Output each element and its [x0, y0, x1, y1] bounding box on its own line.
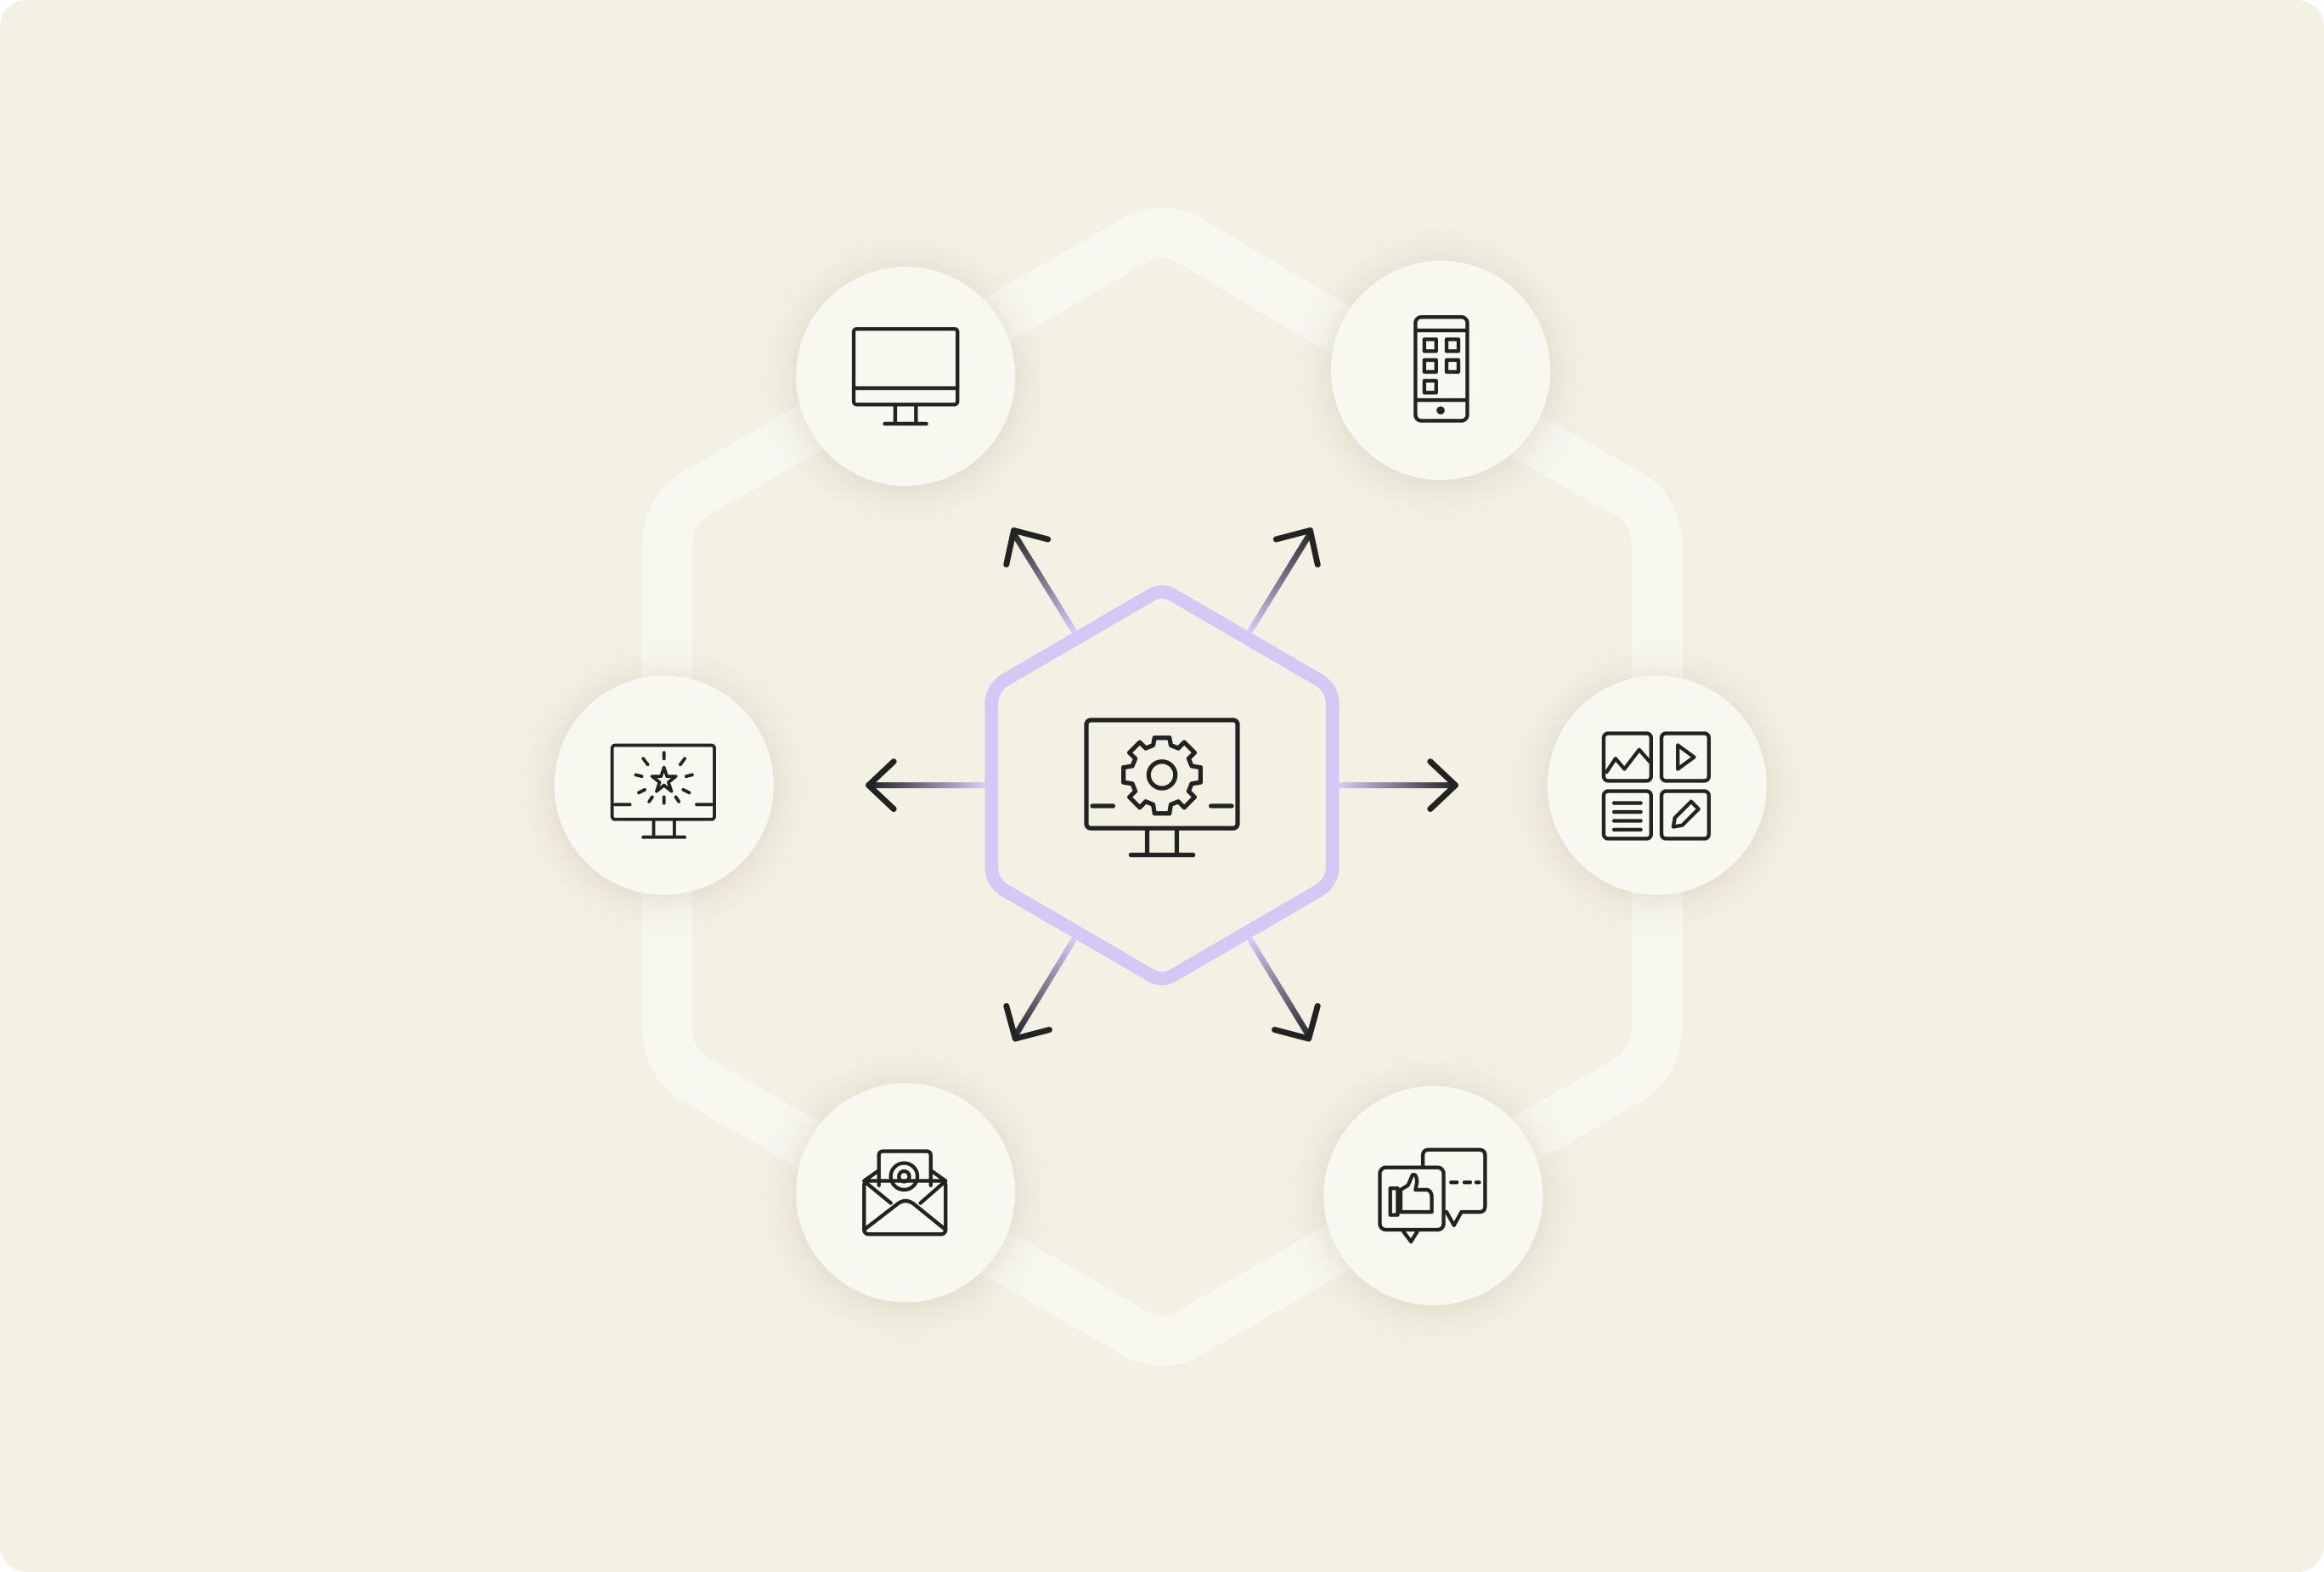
outer hexagon ring — [667, 233, 1657, 1341]
icon: central monitor with gear — [1086, 720, 1238, 855]
node: media content (right) — [1548, 676, 1767, 895]
arrow: lower left — [1007, 941, 1073, 1039]
icon: monitor — [854, 329, 957, 424]
node: featured screen (left) — [555, 676, 774, 895]
arrow: lower right — [1251, 941, 1317, 1039]
icon: chat bubbles with like — [1379, 1150, 1485, 1242]
node: desktop monitor (top left) — [796, 267, 1015, 486]
node: mobile phone (top right) — [1331, 261, 1550, 480]
central hexagon — [991, 592, 1333, 978]
node: social chat (bottom right) — [1323, 1086, 1543, 1305]
icon: monitor with star — [612, 746, 714, 837]
icon: media grid — [1604, 734, 1709, 838]
arrow: upper right — [1251, 531, 1317, 629]
arrow: right — [1341, 762, 1455, 809]
arrow: upper left — [1007, 531, 1073, 629]
icon: envelope with at sign — [864, 1152, 945, 1234]
icon: phone with apps — [1415, 317, 1467, 420]
node: email (bottom left) — [796, 1083, 1015, 1302]
arrow: left — [869, 762, 983, 809]
